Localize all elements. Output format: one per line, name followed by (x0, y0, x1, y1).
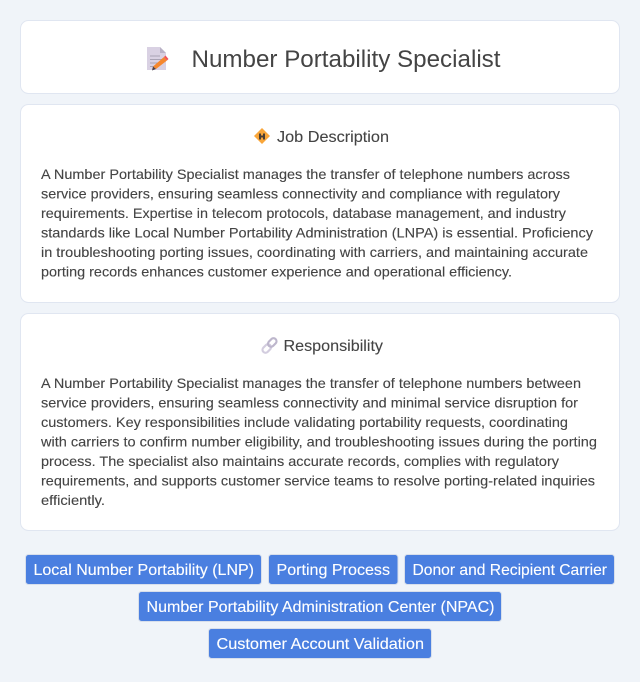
icon: document with pencil (147, 47, 168, 70)
tag: local number portability: Local Number Portability (LNP) (34, 562, 254, 579)
text block: responsibility: with carriers to confirm number eligibility, and troubleshooting issues during the porting (40, 434, 597, 450)
panel: title card (20, 20, 620, 94)
tag: local number portability (26, 554, 262, 584)
text block: responsibility: A Number Portability Specialist manages the transfer of telephone numbers between (41, 375, 581, 391)
text block: job description (41, 166, 593, 280)
title: Number Portability Specialist (192, 46, 501, 73)
tag: customer account validation: Customer Account Validation (216, 636, 424, 653)
tag: customer account validation (208, 628, 432, 658)
heading: job description: Job Description (277, 129, 389, 146)
icon: orange diamond sign (254, 128, 270, 144)
tag: donor and recipient carrier (404, 554, 614, 584)
text block: responsibility: customers. Key responsibilities include validating portability requests, coordinating (41, 414, 568, 430)
text block: job description: standards like Local Number Portability Administration (LNPA) is essential. Proficiency (41, 224, 593, 240)
text block: job description: in troubleshooting porting issues, coordinating with carriers, and maintaining accurate (41, 244, 588, 260)
text block: job description: requirements. Expertise in telecom protocols, database management, and industry (41, 205, 566, 221)
icon: chain link (261, 337, 278, 354)
text block: responsibility: requirements, and supports customer service teams to resolve porting-related inquiries (41, 472, 595, 488)
text block: responsibility (40, 375, 597, 508)
text block: job description: porting records enhances customer experience and operational efficiency. (41, 264, 512, 280)
panel: job description (20, 104, 620, 302)
text block: responsibility: efficiently. (41, 492, 105, 508)
tag: porting process: Porting Process (276, 562, 390, 579)
text block: responsibility: service providers, ensuring seamless connectivity and minimal service disruption for (41, 394, 578, 410)
tag: porting process (268, 554, 398, 584)
heading: responsibility: Responsibility (284, 338, 383, 355)
tag: npac: Number Portability Administration Center (NPAC) (146, 599, 494, 616)
tags (26, 554, 614, 658)
tag: donor and recipient carrier: Donor and Recipient Carrier (412, 562, 608, 579)
text block: job description: service providers, ensuring seamless connectivity and compliance with regulatory (41, 186, 560, 202)
tag: npac (138, 592, 502, 622)
panel: responsibility (20, 314, 620, 530)
text block: job description: A Number Portability Specialist manages the transfer of telephone numbers across (41, 166, 570, 182)
text block: responsibility: process. The specialist also maintains accurate records, complies with regulatory (41, 453, 559, 469)
